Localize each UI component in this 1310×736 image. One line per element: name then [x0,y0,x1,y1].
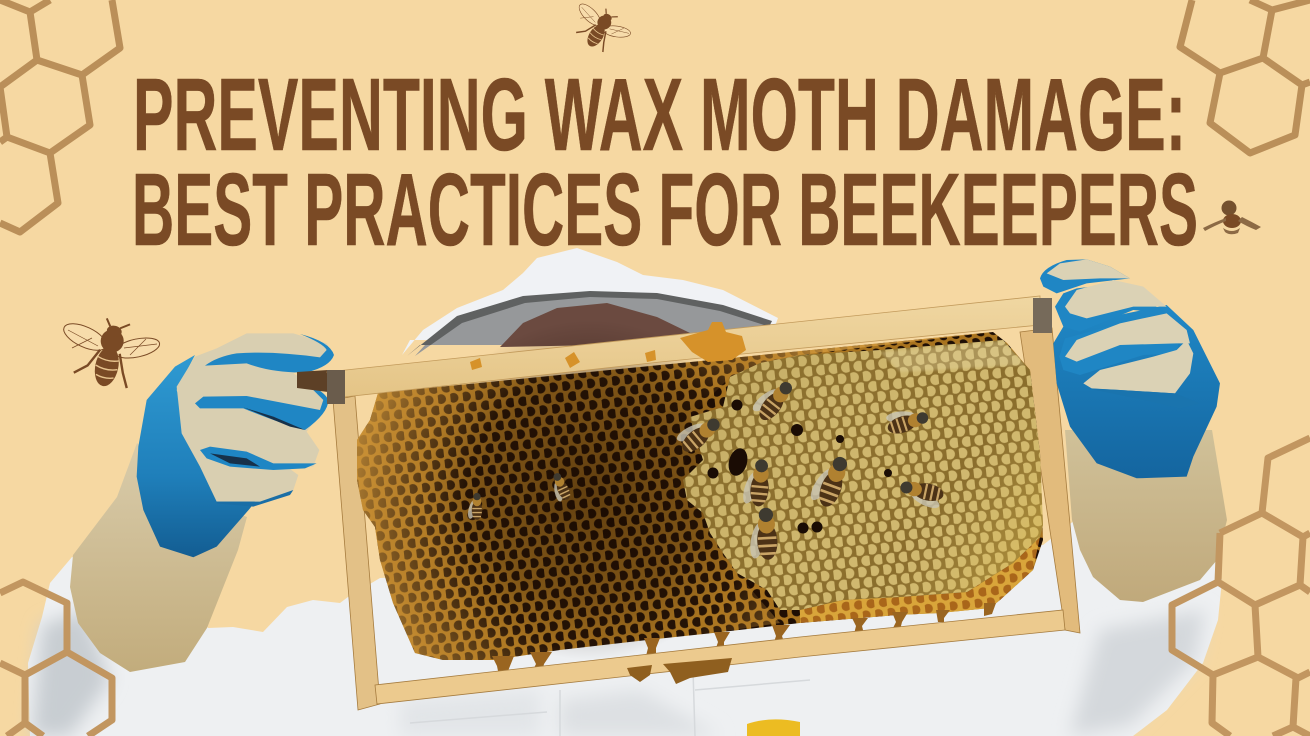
honeycomb decoration: bottom right [1172,438,1310,736]
right glove finger four [1083,340,1193,393]
bee icon: top centre [565,0,638,61]
comb: wax drips to bottom bar [492,603,996,676]
suit shading [32,610,1205,736]
comb: open dark cells in capped area [708,400,892,534]
frame bottom bar [375,610,1065,704]
left glove blue back [137,355,255,557]
bees on comb [466,372,945,561]
left glove leather palm [177,333,333,502]
right glove blue back [1053,305,1220,478]
suit pocket seams [410,670,810,736]
left glove [137,333,334,557]
comb frame and honeycomb [297,296,1080,710]
honeycomb decoration: bottom left [0,582,112,736]
right glove finger three [1059,313,1178,375]
comb: capped colour wash [683,340,1043,610]
beekeeper hood [402,248,778,356]
bee icon: left [60,314,161,391]
wax lumps on the top bar [470,322,746,370]
suit label [747,719,800,736]
comb: pale cell rim at top [880,341,1025,372]
honeycomb decoration: top right [1180,0,1310,153]
bar stub behind left clip [297,370,328,392]
wax lumps under the bottom bar [627,658,732,684]
beekeeper suit [28,520,1222,736]
frame left bar [333,396,380,710]
right gauntlet [1065,430,1227,602]
honeycomb [357,320,1043,676]
comb: dark centre [420,320,760,660]
comb: capped cells [683,340,1043,610]
comb: dark open cells [357,332,1043,660]
frame clip right [1033,298,1052,333]
comb: warm glow over the outer cells [357,332,993,660]
honeycomb decoration: top left [0,0,120,232]
right glove finger one [1040,259,1130,293]
frame clip left [327,370,345,404]
frame top bar [327,296,1040,398]
right glove [1040,259,1220,478]
comb: golden lower right cells [800,537,1040,623]
frame right bar [1020,328,1080,633]
left glove finger bands [205,334,334,372]
right glove finger two [1055,283,1167,332]
title [132,57,1198,267]
left gauntlet [70,443,247,672]
bee icon: right of title [1203,200,1261,234]
